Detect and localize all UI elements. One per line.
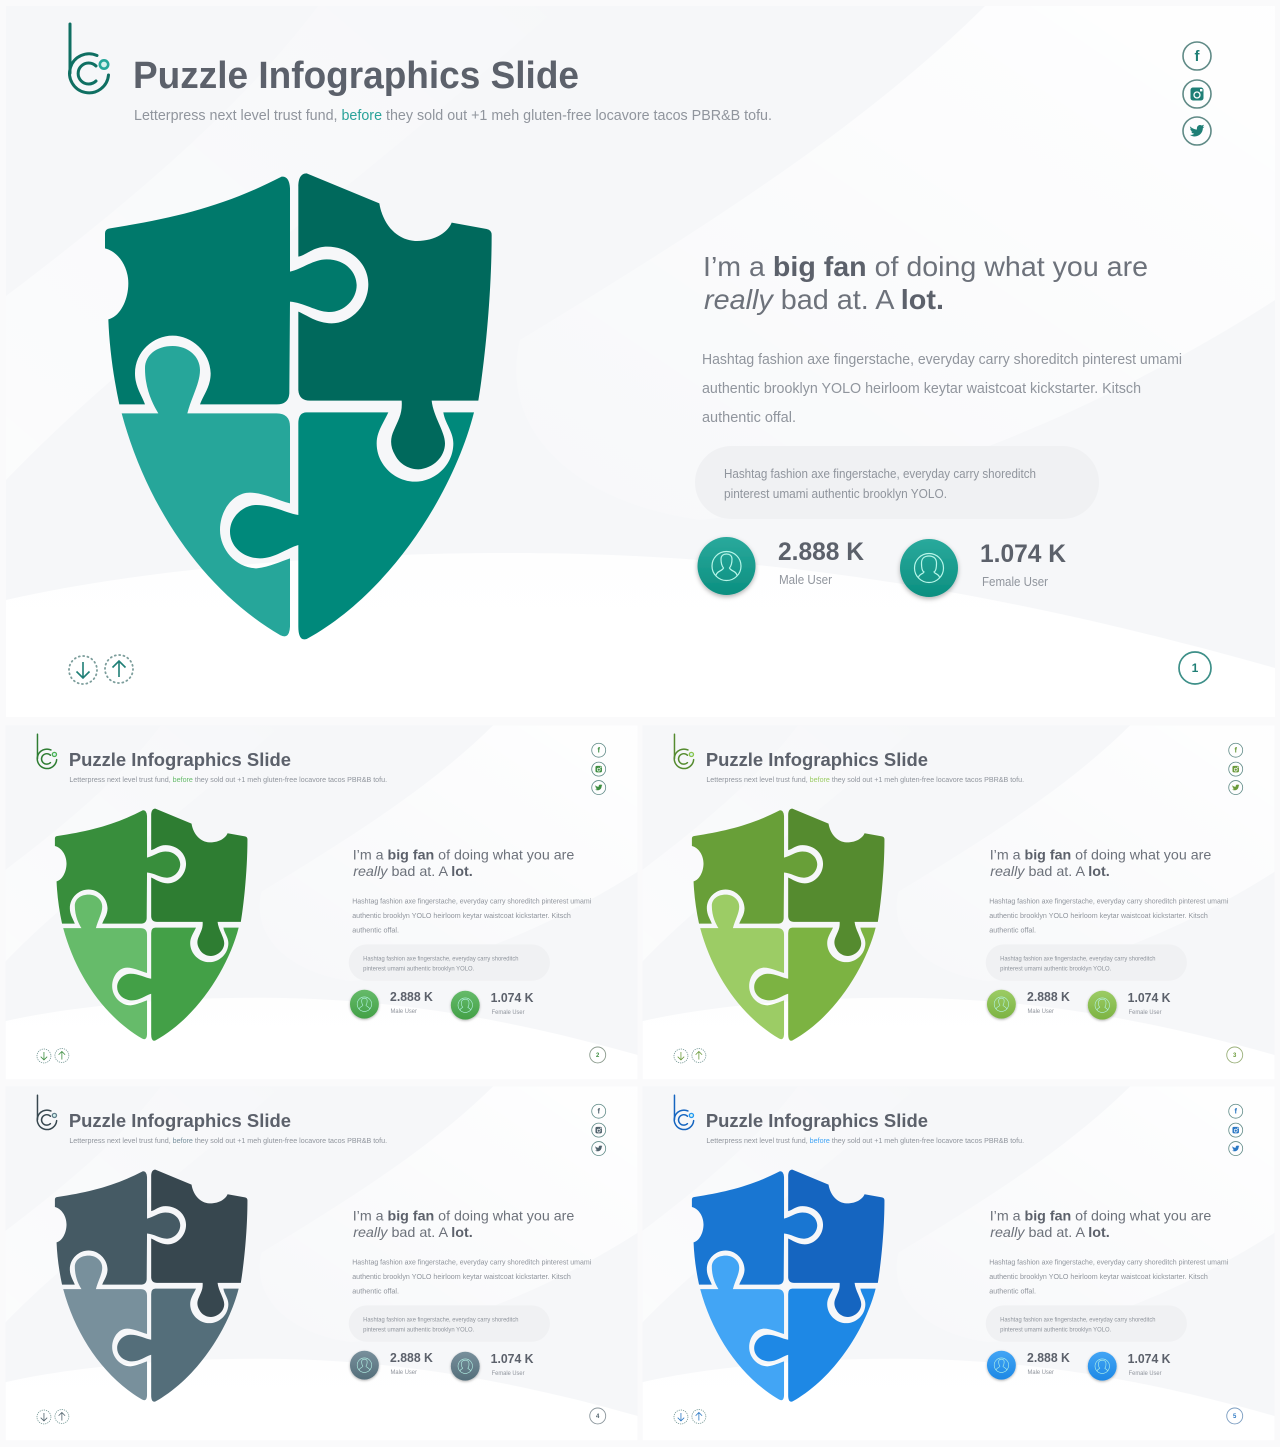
callout pill — [349, 1305, 550, 1342]
paragraph: authentic brooklyn YOLO heirloom keytar waistcoat kickstarter. Kitsch — [989, 1272, 1208, 1281]
stat: male users — [987, 990, 1070, 1019]
page number — [590, 1408, 606, 1424]
social icons: f — [597, 746, 600, 755]
stat: male users — [987, 1351, 1070, 1380]
stat: female users: 1.074 K — [1128, 1352, 1170, 1366]
stat: male users: Male User — [1028, 1008, 1055, 1015]
page number: 5 — [1233, 1414, 1237, 1420]
paragraph: Hashtag fashion axe fingerstache, everyday carry shoreditch pinterest umami — [702, 352, 1182, 368]
heading: I’m a big fan of doing what you are — [353, 1208, 575, 1224]
page number: 2 — [596, 1053, 600, 1059]
navigation arrows — [37, 1410, 69, 1424]
logo — [37, 1095, 57, 1130]
heading: I’m a big fan of doing what you are — [990, 847, 1212, 863]
social icons — [1229, 1104, 1243, 1156]
callout pill: Hashtag fashion axe fingerstache, everyday carry shoreditch — [724, 467, 1036, 481]
social icons: f — [597, 1107, 600, 1116]
stat: female users: Female User — [982, 574, 1049, 589]
callout pill — [349, 944, 550, 981]
puzzle shield — [55, 1170, 247, 1402]
logo — [674, 734, 694, 769]
stat: male users — [350, 990, 433, 1019]
social icons: f — [1234, 1107, 1237, 1116]
subtitle: Letterpress next level trust fund, before they sold out +1 meh gluten-free locavore tacos PBR&B tofu. — [706, 775, 1024, 784]
callout pill: Hashtag fashion axe fingerstache, everyday carry shoreditch — [1000, 1316, 1156, 1323]
navigation arrows — [69, 655, 133, 684]
heading: I’m a big fan of doing what you are — [703, 251, 1148, 282]
stat: female users: Female User — [1129, 1370, 1162, 1377]
paragraph: authentic offal. — [352, 925, 399, 934]
stat: female users: 1.074 K — [491, 991, 533, 1005]
social icons: f — [1194, 48, 1200, 65]
stat: female users — [451, 1352, 533, 1381]
social icons: f — [1234, 746, 1237, 755]
slide background — [6, 6, 1275, 717]
heading — [353, 847, 575, 879]
page number — [590, 1047, 606, 1063]
paragraph — [702, 352, 1182, 426]
social icons — [592, 1104, 606, 1156]
callout pill: Hashtag fashion axe fingerstache, everyday carry shoreditch — [1000, 955, 1156, 962]
page number — [1227, 1047, 1243, 1063]
slide background — [643, 1086, 1275, 1440]
heading: really bad at. A lot. — [704, 284, 944, 315]
puzzle shield — [692, 809, 884, 1041]
subtitle: Letterpress next level trust fund, before they sold out +1 meh gluten-free locavore tacos PBR&B tofu. — [706, 1136, 1024, 1145]
paragraph: authentic brooklyn YOLO heirloom keytar waistcoat kickstarter. Kitsch — [352, 911, 571, 920]
logo — [37, 734, 57, 769]
heading: I’m a big fan of doing what you are — [990, 1208, 1212, 1224]
logo — [674, 1095, 694, 1130]
page number — [1227, 1408, 1243, 1424]
navigation arrows — [674, 1410, 706, 1424]
heading: really bad at. A lot. — [990, 1224, 1110, 1240]
paragraph: authentic offal. — [352, 1286, 399, 1295]
heading — [990, 1208, 1212, 1240]
panel: light green slide — [643, 725, 1275, 1079]
paragraph — [989, 897, 1229, 934]
paragraph: authentic offal. — [989, 1286, 1036, 1295]
stat: female users: Female User — [492, 1370, 525, 1377]
page number: 1 — [1192, 661, 1199, 675]
stat: female users: 1.074 K — [491, 1352, 533, 1366]
paragraph: authentic brooklyn YOLO heirloom keytar waistcoat kickstarter. Kitsch — [702, 381, 1141, 397]
heading — [703, 251, 1148, 315]
stat: female users: Female User — [492, 1009, 525, 1016]
callout pill — [695, 446, 1099, 519]
stat: female users: Female User — [1129, 1009, 1162, 1016]
panel: blue slide — [643, 1086, 1275, 1440]
panel: blue-grey slide — [6, 1086, 638, 1440]
paragraph: Hashtag fashion axe fingerstache, everyday carry shoreditch pinterest umami — [989, 897, 1229, 906]
slide background — [6, 725, 638, 1079]
callout pill: pinterest umami authentic brooklyn YOLO. — [724, 487, 947, 501]
paragraph: Hashtag fashion axe fingerstache, everyday carry shoreditch pinterest umami — [352, 1258, 592, 1267]
paragraph — [352, 1258, 592, 1295]
page number: 4 — [596, 1414, 600, 1420]
callout pill: pinterest umami authentic brooklyn YOLO. — [363, 1326, 474, 1333]
callout pill: Hashtag fashion axe fingerstache, everyday carry shoreditch — [363, 955, 519, 962]
stat: male users: Male User — [391, 1008, 418, 1015]
paragraph: authentic brooklyn YOLO heirloom keytar waistcoat kickstarter. Kitsch — [989, 911, 1208, 920]
paragraph: authentic offal. — [702, 410, 796, 426]
stat: male users: 2.888 K — [390, 990, 433, 1004]
title: Puzzle Infographics Slide — [69, 1111, 291, 1132]
stat: female users: 1.074 K — [980, 540, 1066, 568]
callout pill: pinterest umami authentic brooklyn YOLO. — [363, 965, 474, 972]
callout pill: Hashtag fashion axe fingerstache, everyday carry shoreditch — [363, 1316, 519, 1323]
paragraph: Hashtag fashion axe fingerstache, everyday carry shoreditch pinterest umami — [989, 1258, 1229, 1267]
page number: 3 — [1233, 1053, 1237, 1059]
title: Puzzle Infographics Slide — [69, 750, 291, 771]
callout pill — [986, 944, 1187, 981]
stat: male users: 2.888 K — [1027, 1351, 1070, 1365]
paragraph: authentic offal. — [989, 925, 1036, 934]
puzzle shield — [55, 809, 247, 1041]
stat: female users — [1088, 1352, 1170, 1381]
panel: main teal slide — [6, 6, 1275, 717]
heading — [353, 1208, 575, 1240]
heading: really bad at. A lot. — [353, 1224, 473, 1240]
subtitle: Letterpress next level trust fund, before they sold out +1 meh gluten-free locavore tacos PBR&B tofu. — [134, 108, 772, 124]
paragraph — [989, 1258, 1229, 1295]
heading: I’m a big fan of doing what you are — [353, 847, 575, 863]
stat: female users — [900, 539, 1066, 597]
puzzle shield — [105, 173, 492, 639]
stat: male users: 2.888 K — [778, 538, 864, 566]
stat: male users: Male User — [391, 1369, 418, 1376]
navigation arrows — [37, 1049, 69, 1063]
social icons — [592, 743, 606, 795]
heading — [990, 847, 1212, 879]
stat: male users: Male User — [1028, 1369, 1055, 1376]
puzzle shield — [692, 1170, 884, 1402]
logo — [70, 24, 108, 93]
panel: green slide — [6, 725, 638, 1079]
paragraph: authentic brooklyn YOLO heirloom keytar waistcoat kickstarter. Kitsch — [352, 1272, 571, 1281]
slide background — [6, 1086, 638, 1440]
heading: really bad at. A lot. — [353, 863, 473, 879]
page number — [1179, 652, 1211, 684]
stat: male users — [350, 1351, 433, 1380]
social icons — [1183, 42, 1211, 145]
stat: male users: Male User — [779, 572, 833, 587]
navigation arrows — [674, 1049, 706, 1063]
stat: female users: 1.074 K — [1128, 991, 1170, 1005]
callout pill: pinterest umami authentic brooklyn YOLO. — [1000, 1326, 1111, 1333]
stat: female users — [1088, 991, 1170, 1020]
subtitle: Letterpress next level trust fund, before they sold out +1 meh gluten-free locavore tacos PBR&B tofu. — [69, 1136, 387, 1145]
callout pill: pinterest umami authentic brooklyn YOLO. — [1000, 965, 1111, 972]
heading: really bad at. A lot. — [990, 863, 1110, 879]
paragraph: Hashtag fashion axe fingerstache, everyday carry shoreditch pinterest umami — [352, 897, 592, 906]
paragraph — [352, 897, 592, 934]
title: Puzzle Infographics Slide — [706, 1111, 928, 1132]
stat: male users: 2.888 K — [390, 1351, 433, 1365]
subtitle: Letterpress next level trust fund, before they sold out +1 meh gluten-free locavore tacos PBR&B tofu. — [69, 775, 387, 784]
stat: male users — [698, 537, 864, 595]
slide background — [643, 725, 1275, 1079]
stat: female users — [451, 991, 533, 1020]
title: Puzzle Infographics Slide — [133, 55, 579, 97]
title: Puzzle Infographics Slide — [706, 750, 928, 771]
social icons — [1229, 743, 1243, 795]
stat: male users: 2.888 K — [1027, 990, 1070, 1004]
callout pill — [986, 1305, 1187, 1342]
